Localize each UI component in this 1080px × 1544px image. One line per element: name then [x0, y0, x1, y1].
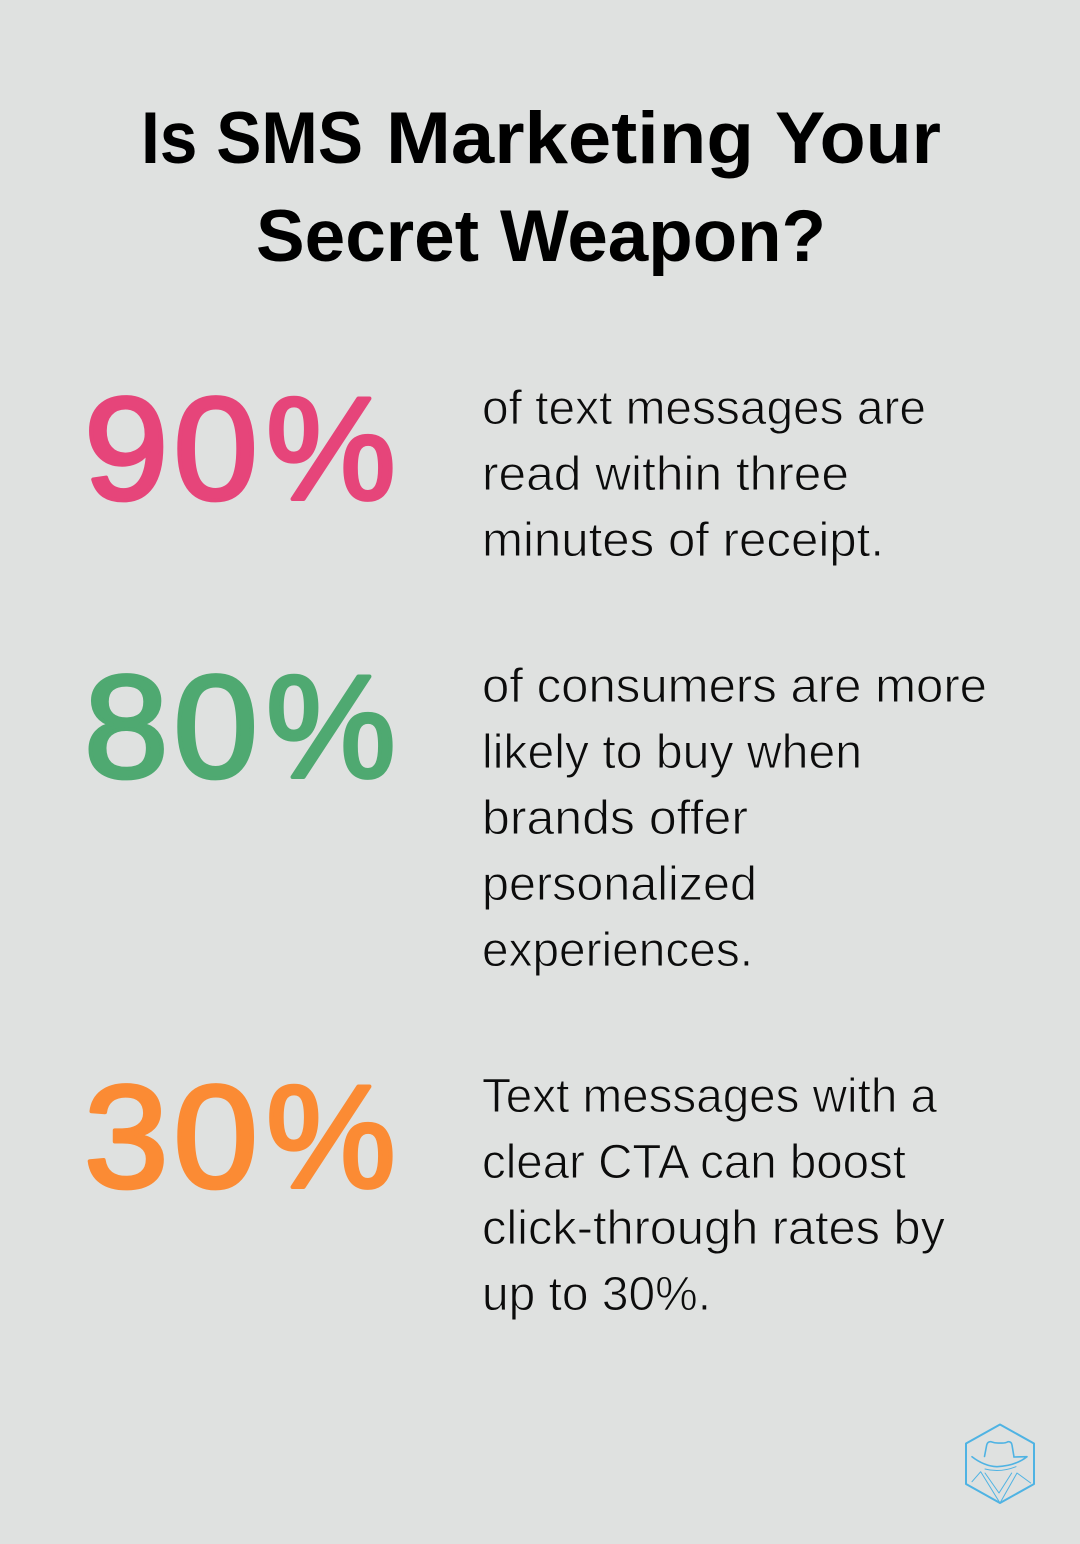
text: 80% description [482, 660, 987, 977]
title: Your [775, 98, 941, 179]
text: 90% description: read within three [482, 448, 849, 501]
stat: 80%: 80 [84, 645, 258, 808]
stat: 30%: % [266, 1055, 396, 1218]
stat: 80% [84, 645, 396, 808]
title: Marketing [386, 98, 754, 179]
text: 80% description: likely to buy when [482, 726, 862, 779]
text: 90% description: minutes of receipt. [482, 514, 884, 567]
title: Secret [256, 196, 479, 277]
icon: spy logo in hexagon [966, 1424, 1034, 1503]
stat: 90%: % [266, 367, 396, 530]
stat: 90%: 90 [84, 367, 258, 530]
text: 30% description: Text messages with a [482, 1070, 937, 1123]
stat: 90% [84, 367, 396, 530]
text: 90% description [482, 382, 926, 567]
title: Is SMS [141, 98, 363, 179]
stat: 80%: % [266, 645, 396, 808]
text: 30% description: click-through rates by [482, 1202, 945, 1255]
title: Weapon? [500, 196, 826, 277]
text: 30% description [482, 1070, 945, 1321]
text: 90% description: of text messages are [482, 382, 926, 435]
text: 80% description: experiences. [482, 924, 753, 977]
stat: 30%: 30 [84, 1055, 258, 1218]
text: 30% description: up to 30%. [482, 1268, 711, 1321]
stat: 30% [84, 1055, 396, 1218]
title [141, 98, 941, 277]
text: 30% description: clear CTA can boost [482, 1136, 906, 1189]
text: 80% description: personalized [482, 858, 757, 911]
text: 80% description: of consumers are more [482, 660, 987, 713]
text: 80% description: brands offer [482, 792, 748, 845]
